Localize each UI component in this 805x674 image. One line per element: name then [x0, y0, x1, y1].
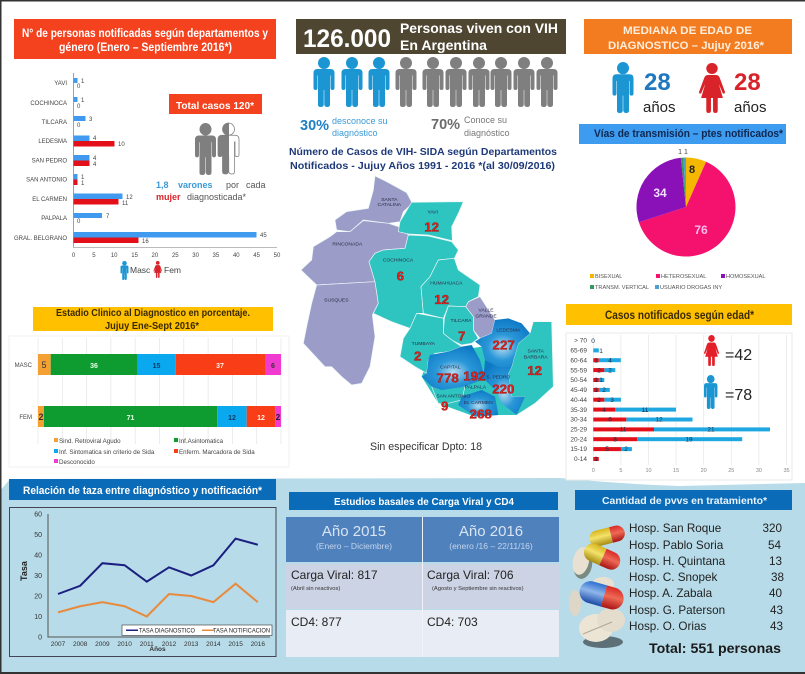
- panel: diagnosis and notification rate: [9, 479, 276, 656]
- stacked bar chart: clinical stage: 71: [127, 415, 134, 422]
- bar chart: cases by age: 6: [608, 416, 612, 424]
- stacked bar chart: clinical stage: 5: [41, 360, 47, 370]
- bar chart: cases by age: 0-14: [574, 456, 587, 463]
- text: 70 percent aware: Conoce su: [464, 115, 507, 125]
- line chart: rates: 2010: [117, 641, 132, 648]
- purple departments: [301, 176, 495, 385]
- bar chart: cases by age: 1: [599, 348, 603, 355]
- line chart: rates: 2012: [162, 641, 177, 648]
- stacked bar chart: clinical stage: 12: [257, 415, 265, 422]
- line chart: rates: TASA NOTIFICACION: [213, 628, 270, 634]
- table: 2015 and 2016: (enero /16 – 22/11/16): [449, 541, 533, 551]
- pie chart: transmission: 76: [694, 223, 708, 237]
- department names: CATALINA: [378, 202, 402, 208]
- list: hospitals: 43: [770, 604, 783, 617]
- banner: 126.000 people: 126.000: [303, 25, 391, 53]
- bar chart: cases by age: 11: [642, 407, 649, 414]
- bar chart: cases by department: 1: [81, 175, 85, 181]
- icon: pills: [569, 524, 627, 648]
- bar chart: cases by department: 35: [213, 253, 220, 259]
- text: unspecified department: Sin especificar Dpto: 18: [370, 441, 482, 453]
- text: male to female ratio: [156, 180, 266, 202]
- stacked bar chart: clinical stage: 36: [90, 363, 98, 370]
- banner: 126.000 people: Personas viven con VIH: [400, 20, 558, 36]
- bar chart: cases by department: LEDESMA: [38, 139, 67, 145]
- stacked bar chart: clinical stage: [15, 338, 281, 444]
- bar chart: cases by age: 20: [701, 468, 707, 474]
- list: hospitals: Hosp. C. Snopek: [629, 571, 718, 584]
- bar chart: cases by age: 2: [597, 397, 601, 404]
- bar chart: cases by age: 65-69: [570, 348, 587, 354]
- legend: masc and fem: Fem: [164, 265, 181, 275]
- stacked bar chart: clinical stage: 6: [271, 363, 275, 370]
- blue departments: [422, 318, 530, 417]
- stacked bar legend: Sind. Retroviral Agudo: [59, 438, 121, 445]
- text: male to female ratio: diagnosticada*: [187, 192, 247, 202]
- pie legend: HOMOSEXUAL: [726, 274, 765, 280]
- bar chart: cases by department: 7: [106, 214, 110, 220]
- stacked bar legend: Inf. Sintomatica sin criterio de Sida: [59, 449, 155, 456]
- line chart: rates: 2007: [51, 641, 66, 648]
- text: male to female ratio: 1,8: [156, 180, 169, 190]
- line chart: rates: 2009: [95, 641, 110, 648]
- bar chart: cases by department: 5: [92, 253, 96, 259]
- department names: HUMAHUACA: [430, 280, 463, 286]
- list: hospitals: Hosp. San Roque: [629, 522, 721, 535]
- case counts: 9: [441, 399, 448, 414]
- case counts: 7: [458, 329, 465, 344]
- line chart: rates: Tasa: [19, 560, 29, 581]
- line chart: rates: 2011: [140, 641, 154, 648]
- heading: transmission routes: [579, 124, 786, 144]
- bar chart: cases by department: SAN ANTONIO: [26, 178, 67, 184]
- bar chart: cases by age: 30: [756, 468, 762, 474]
- line chart: rates: 2016: [251, 641, 265, 648]
- bar chart: cases by department: GRAL. BELGRANO: [14, 236, 67, 242]
- case counts: 227: [493, 338, 515, 353]
- bar chart: cases by age: 30-34: [570, 416, 587, 424]
- map: Jujuy departments: [301, 176, 553, 422]
- case counts: 12: [424, 219, 439, 234]
- table: 2015 and 2016: (Abril sin reactivos): [291, 586, 340, 592]
- bar chart: cases by age: 2: [602, 387, 606, 394]
- callout: total cases: [169, 94, 262, 114]
- department names: S. PEDRO: [486, 375, 510, 381]
- bar chart: cases by age: 55-59: [570, 368, 587, 374]
- heading: median age: [584, 19, 792, 54]
- department names: PALPALA: [465, 385, 487, 391]
- male median age: [612, 62, 676, 116]
- panel: median age at diagnosis: [584, 19, 792, 116]
- line chart: rates: 2013: [184, 641, 199, 648]
- bar chart: cases by department: 3: [89, 117, 93, 123]
- table: 2015 and 2016: Año 2015: [322, 523, 386, 540]
- teal departments: [369, 202, 553, 417]
- bar chart: cases by department: 40: [233, 253, 240, 259]
- panel: clinical stage at diagnosis: [9, 307, 289, 467]
- case counts: 12: [434, 292, 449, 307]
- bar chart: cases by department: 30: [192, 253, 200, 259]
- bar chart: cases by age: 5: [619, 468, 622, 474]
- heading: cases by age: [566, 304, 792, 325]
- bar chart: cases by age: 1: [594, 377, 598, 384]
- list: hospitals: 320: [762, 522, 782, 535]
- bar chart: cases by department: 45: [253, 253, 261, 259]
- bar chart: cases by age: 21: [707, 426, 715, 434]
- bar chart: cases by age: 35: [783, 468, 790, 474]
- text: male to female ratio: varones: [178, 180, 213, 190]
- table: 2015 and 2016: Carga Viral: 817: [291, 568, 378, 582]
- heading: cases by age: Casos notificados según edad*: [605, 310, 754, 322]
- line chart: rates: 10: [34, 614, 42, 621]
- pie legend: HETEROSEXUAL: [661, 274, 706, 280]
- heading: notified persons: género (Enero – Septiembre 2016*): [59, 42, 232, 54]
- department names: COCHINOCA: [383, 258, 414, 264]
- department names: YAVI: [427, 209, 438, 215]
- bar chart: cases by age: 25-29: [570, 426, 587, 434]
- callout: female cases: [704, 335, 752, 366]
- department names: SAN ANTONIO: [436, 393, 470, 399]
- case counts: 192: [463, 368, 485, 383]
- legend: masc and fem: [120, 261, 181, 280]
- heading: map title: Número de Casos de VIH- SIDA según Departamentos: [289, 147, 557, 158]
- text: male to female ratio: mujer: [156, 192, 181, 202]
- bar chart: cases by age: 10: [645, 468, 652, 474]
- callout: female cases: =42: [725, 347, 752, 364]
- bar chart: cases by department: 15: [131, 253, 139, 259]
- panel: baseline viral load and CD4: [286, 492, 559, 657]
- line chart: rates: 2008: [73, 641, 88, 648]
- bar chart: cases by age: 11: [620, 426, 627, 434]
- stacked bar legend: Enferm. Marcadora de Sida: [179, 449, 255, 456]
- bar chart: cases by department: 1: [81, 181, 85, 187]
- list: hospitals: [629, 522, 784, 633]
- bar chart: cases by age: 2: [624, 446, 628, 453]
- department names: VALLE: [478, 308, 494, 314]
- department names: SUSQUES: [324, 298, 349, 304]
- bar chart: cases by age: 60-64: [570, 358, 587, 364]
- bar chart: cases by department: SAN PEDRO: [32, 158, 67, 164]
- female median age: años: [734, 99, 767, 116]
- bar chart: cases by department: 10: [118, 142, 125, 148]
- text: male to female ratio: cada: [246, 180, 266, 190]
- bar chart: cases by department: 1: [81, 79, 85, 85]
- list: hospitals: 40: [769, 587, 782, 600]
- text: 30 percent unaware: 30%: [300, 118, 329, 134]
- line chart: rates: 60: [34, 512, 42, 518]
- bar chart: cases by department: 4: [93, 156, 97, 162]
- text: 30 percent unaware: desconoce su: [332, 116, 388, 126]
- bar chart: cases by department: 0: [72, 253, 76, 259]
- pie legend: [590, 274, 765, 291]
- list: hospitals: 13: [769, 555, 782, 568]
- stacked bar chart: clinical stage: 2: [38, 412, 44, 422]
- line chart: rates: [10, 508, 276, 656]
- department names: EL CARMEN: [464, 400, 493, 406]
- line chart: rates: 50: [34, 532, 42, 539]
- stacked bar chart: clinical stage: 12: [228, 415, 236, 422]
- list: hospitals: 43: [770, 620, 783, 633]
- department names: LEDESMA: [496, 328, 521, 334]
- bar chart: cases by age: [570, 335, 790, 474]
- department names: RINCONADA: [332, 241, 363, 247]
- pie chart: transmission: 1 1: [678, 149, 688, 156]
- text: male to female ratio: por: [226, 180, 239, 190]
- department names: [324, 197, 548, 406]
- bar chart: cases by department: 10: [111, 253, 118, 259]
- table: 2015 and 2016: Año 2016: [459, 523, 523, 540]
- heading: people on treatment: [575, 490, 792, 510]
- heading: clinical stage: Jujuy Ene-Sept 2016*: [105, 321, 199, 332]
- bar chart: cases by age: 19: [685, 436, 693, 444]
- table: 2015 and 2016: Carga Viral: 706: [427, 568, 514, 582]
- list: hospitals: Hosp. Pablo Soria: [629, 539, 724, 552]
- text: 30 percent unaware: diagnóstico: [332, 128, 378, 138]
- legend: masc and fem: Masc: [130, 265, 151, 275]
- heading: transmission routes: Vías de transmisión – ptes notificados*: [594, 128, 784, 140]
- case counts: 6: [397, 269, 404, 284]
- line chart: rates: 0: [38, 634, 42, 642]
- bar chart: cases by age: 40-44: [570, 397, 587, 404]
- line chart: rates: 2015: [228, 641, 243, 648]
- department names: TILCARA: [450, 318, 472, 324]
- case counts: 778: [437, 371, 459, 386]
- bar chart: cases by department: 0: [77, 123, 81, 129]
- bar chart: cases by department: 4: [93, 136, 97, 142]
- line chart: rates: 40: [34, 552, 42, 560]
- list: hospitals: 54: [768, 539, 781, 552]
- bar chart: cases by age: 0: [591, 338, 595, 345]
- line chart: rates: 2014: [206, 641, 221, 648]
- stacked bar legend: Inf.Asintomatica: [179, 438, 224, 445]
- panel: transmission routes: [579, 124, 786, 291]
- bar chart: cases by age: 15: [673, 468, 679, 474]
- bar chart: cases by age: 45-49: [570, 387, 587, 394]
- line chart: rates: 20: [34, 594, 42, 600]
- heading: median age: MEDIANA DE EDAD DE: [623, 25, 752, 37]
- bar chart: cases by age: > 70: [574, 338, 587, 344]
- bar chart: cases by department: 16: [142, 239, 149, 245]
- list: hospitals: Hosp. A. Zabala: [629, 587, 713, 600]
- bar chart: cases by department: 12: [126, 195, 133, 201]
- line chart: rates: 30: [34, 573, 42, 580]
- table: 2015 and 2016: CD4: 703: [427, 615, 478, 629]
- stacked bar chart: clinical stage: FEM: [19, 415, 32, 421]
- bar chart: cases by age: 2: [597, 368, 601, 374]
- list: hospitals: Hosp. H. Quintana: [629, 555, 726, 568]
- heading: map title: [289, 147, 557, 172]
- bar chart: cases by age: 15-19: [570, 446, 587, 453]
- bar chart: cases by department: 25: [172, 253, 179, 259]
- bar chart: cases by age: 2: [608, 368, 612, 374]
- bar chart: cases by department: 0: [77, 84, 81, 90]
- case counts: 2: [414, 349, 421, 364]
- bar chart: cases by department: 11: [122, 201, 129, 207]
- table: 2015 and 2016: CD4: 877: [291, 615, 342, 629]
- case counts: 268: [470, 407, 492, 422]
- banner: 126.000 people: En Argentina: [400, 37, 487, 53]
- text: 70 percent aware: 70%: [431, 117, 460, 133]
- panel: people living with HIV in Argentina: [289, 19, 566, 172]
- bar chart: cases by age: 1: [594, 456, 598, 463]
- text: total: Total: 551 personas: [649, 640, 781, 656]
- case counts: 12: [527, 363, 542, 378]
- list: hospitals: Hosp. O. Orias: [629, 620, 706, 633]
- bar chart: cases by department: 45: [260, 233, 267, 239]
- bar chart: cases by department: COCHINOCA: [30, 101, 67, 107]
- heading: rate relation: [9, 479, 276, 500]
- male median age: 28: [644, 69, 671, 96]
- bar chart: cases by age: 20-24: [570, 436, 587, 444]
- bar chart: cases by age: 1: [594, 387, 598, 394]
- department names: SANTA: [528, 348, 544, 354]
- bar chart: cases by age: 4: [602, 407, 606, 414]
- bar chart: cases by department: 50: [274, 253, 281, 259]
- icon: two grey persons: [195, 123, 239, 175]
- male median age: años: [643, 99, 676, 116]
- callout: male cases: [704, 375, 752, 409]
- bar chart: cases by department: 1: [81, 98, 85, 104]
- female median age: 28: [734, 69, 761, 96]
- case counts: [397, 219, 542, 422]
- bar chart: cases by department: YAVI: [54, 81, 67, 87]
- callout: total cases: Total casos 120*: [176, 100, 255, 112]
- lower light blue band: [0, 478, 805, 674]
- stacked bar chart: clinical stage: MASC: [15, 363, 33, 369]
- callout: male cases: =78: [725, 387, 752, 404]
- female median age: [699, 63, 767, 116]
- bar chart: cases by age: 4: [608, 358, 612, 364]
- stacked bar chart: clinical stage: 2: [276, 413, 281, 422]
- pie chart: transmission: 8: [689, 164, 695, 176]
- heading: clinical stage: [33, 307, 273, 332]
- chart background: [566, 333, 792, 480]
- panel: people on treatment: [569, 490, 792, 656]
- pie chart: transmission: [636, 149, 735, 257]
- bar chart: cases by department: 4: [93, 162, 97, 168]
- heading: rate relation: Relación de taza entre diagnóstico y notificación*: [23, 485, 263, 497]
- bar chart: cases by department: 20: [152, 253, 159, 259]
- bar chart: cases by age: 12: [655, 416, 663, 424]
- bar chart: cases by age: 1: [599, 377, 603, 384]
- pie legend: BISEXUAL: [595, 274, 622, 280]
- department names: TUMBAYA: [412, 341, 436, 347]
- pie legend: USUARIO DROGAS INY: [660, 285, 722, 291]
- bar chart: cases by age: 50-54: [570, 377, 587, 384]
- list: hospitals: 38: [771, 571, 784, 584]
- bar chart: cases by department: EL CARMEN: [32, 197, 67, 203]
- table: 2015 and 2016: (Enero – Diciembre): [316, 541, 392, 551]
- bar chart: cases by department: PALPALA: [41, 216, 67, 222]
- list: hospitals: Hosp. G. Paterson: [629, 604, 725, 617]
- banner: 126.000 people: [296, 19, 566, 54]
- stacked bar legend: Desconocido: [59, 459, 95, 466]
- bar chart: cases by age: 8: [613, 436, 617, 444]
- bar chart: cases by department: 0: [77, 219, 81, 225]
- bar chart: cases by age: 25: [728, 468, 734, 474]
- heading: median age: DIAGNOSTICO – Jujuy 2016*: [608, 40, 765, 52]
- text: 70 percent aware: diagnóstico: [464, 128, 510, 138]
- case counts: 220: [492, 382, 514, 397]
- pie chart: transmission: 34: [653, 186, 667, 200]
- bar chart: cases by age: 5: [605, 446, 609, 453]
- heading: baseline studies: [289, 492, 558, 510]
- heading: clinical stage: Estadio Clinico al Diagnostico en porcentaje.: [56, 308, 250, 319]
- heading: map title: Notificados - Jujuy Años 1991 - 2016 *(al 30/09/2016): [290, 161, 555, 172]
- line chart: rates: TASA DIAGNOSTICO: [139, 628, 195, 634]
- panel: notified persons by department and gender: [14, 19, 281, 280]
- bar chart: cases by age: 1: [594, 358, 598, 364]
- heading: notified persons: N° de personas notificadas según departamentos y: [22, 28, 269, 40]
- bar chart: cases by age: 35-39: [570, 407, 587, 414]
- table: 2015 and 2016: (Agosto y Septiembre sin reactivos): [432, 586, 524, 592]
- department names: GRANDE: [475, 313, 497, 319]
- table: 2015 and 2016: [286, 517, 559, 657]
- pie legend: TRANSM. VERTICAL: [595, 285, 649, 291]
- chart background: [9, 336, 289, 467]
- stacked bar chart: clinical stage: 37: [216, 363, 224, 370]
- panel: cases by age: [566, 304, 792, 480]
- heading: notified persons: [14, 19, 276, 59]
- icon row: ten people: [314, 57, 558, 107]
- department names: SANTA: [381, 197, 398, 203]
- bar chart: cases by department: [14, 73, 281, 259]
- bar chart: cases by age: 3: [610, 397, 614, 404]
- text: 30 percent unaware: [300, 116, 388, 138]
- bar chart: cases by department: 0: [77, 104, 81, 110]
- bar chart: cases by age: 0: [592, 468, 595, 474]
- heading: baseline studies: Estudios basales de Carga Viral y CD4: [334, 496, 514, 508]
- heading: people on treatment: Cantidad de pvvs en tratamiento*: [602, 496, 767, 507]
- text: 70 percent aware: [431, 115, 510, 138]
- bar chart: cases by department: TILCARA: [42, 120, 67, 126]
- stacked bar legend: [54, 438, 255, 466]
- stacked bar chart: clinical stage: 15: [153, 363, 160, 370]
- department names: CAPITAL: [440, 365, 461, 371]
- line chart: rates: Años: [149, 646, 166, 653]
- department names: BARBARA: [524, 354, 548, 360]
